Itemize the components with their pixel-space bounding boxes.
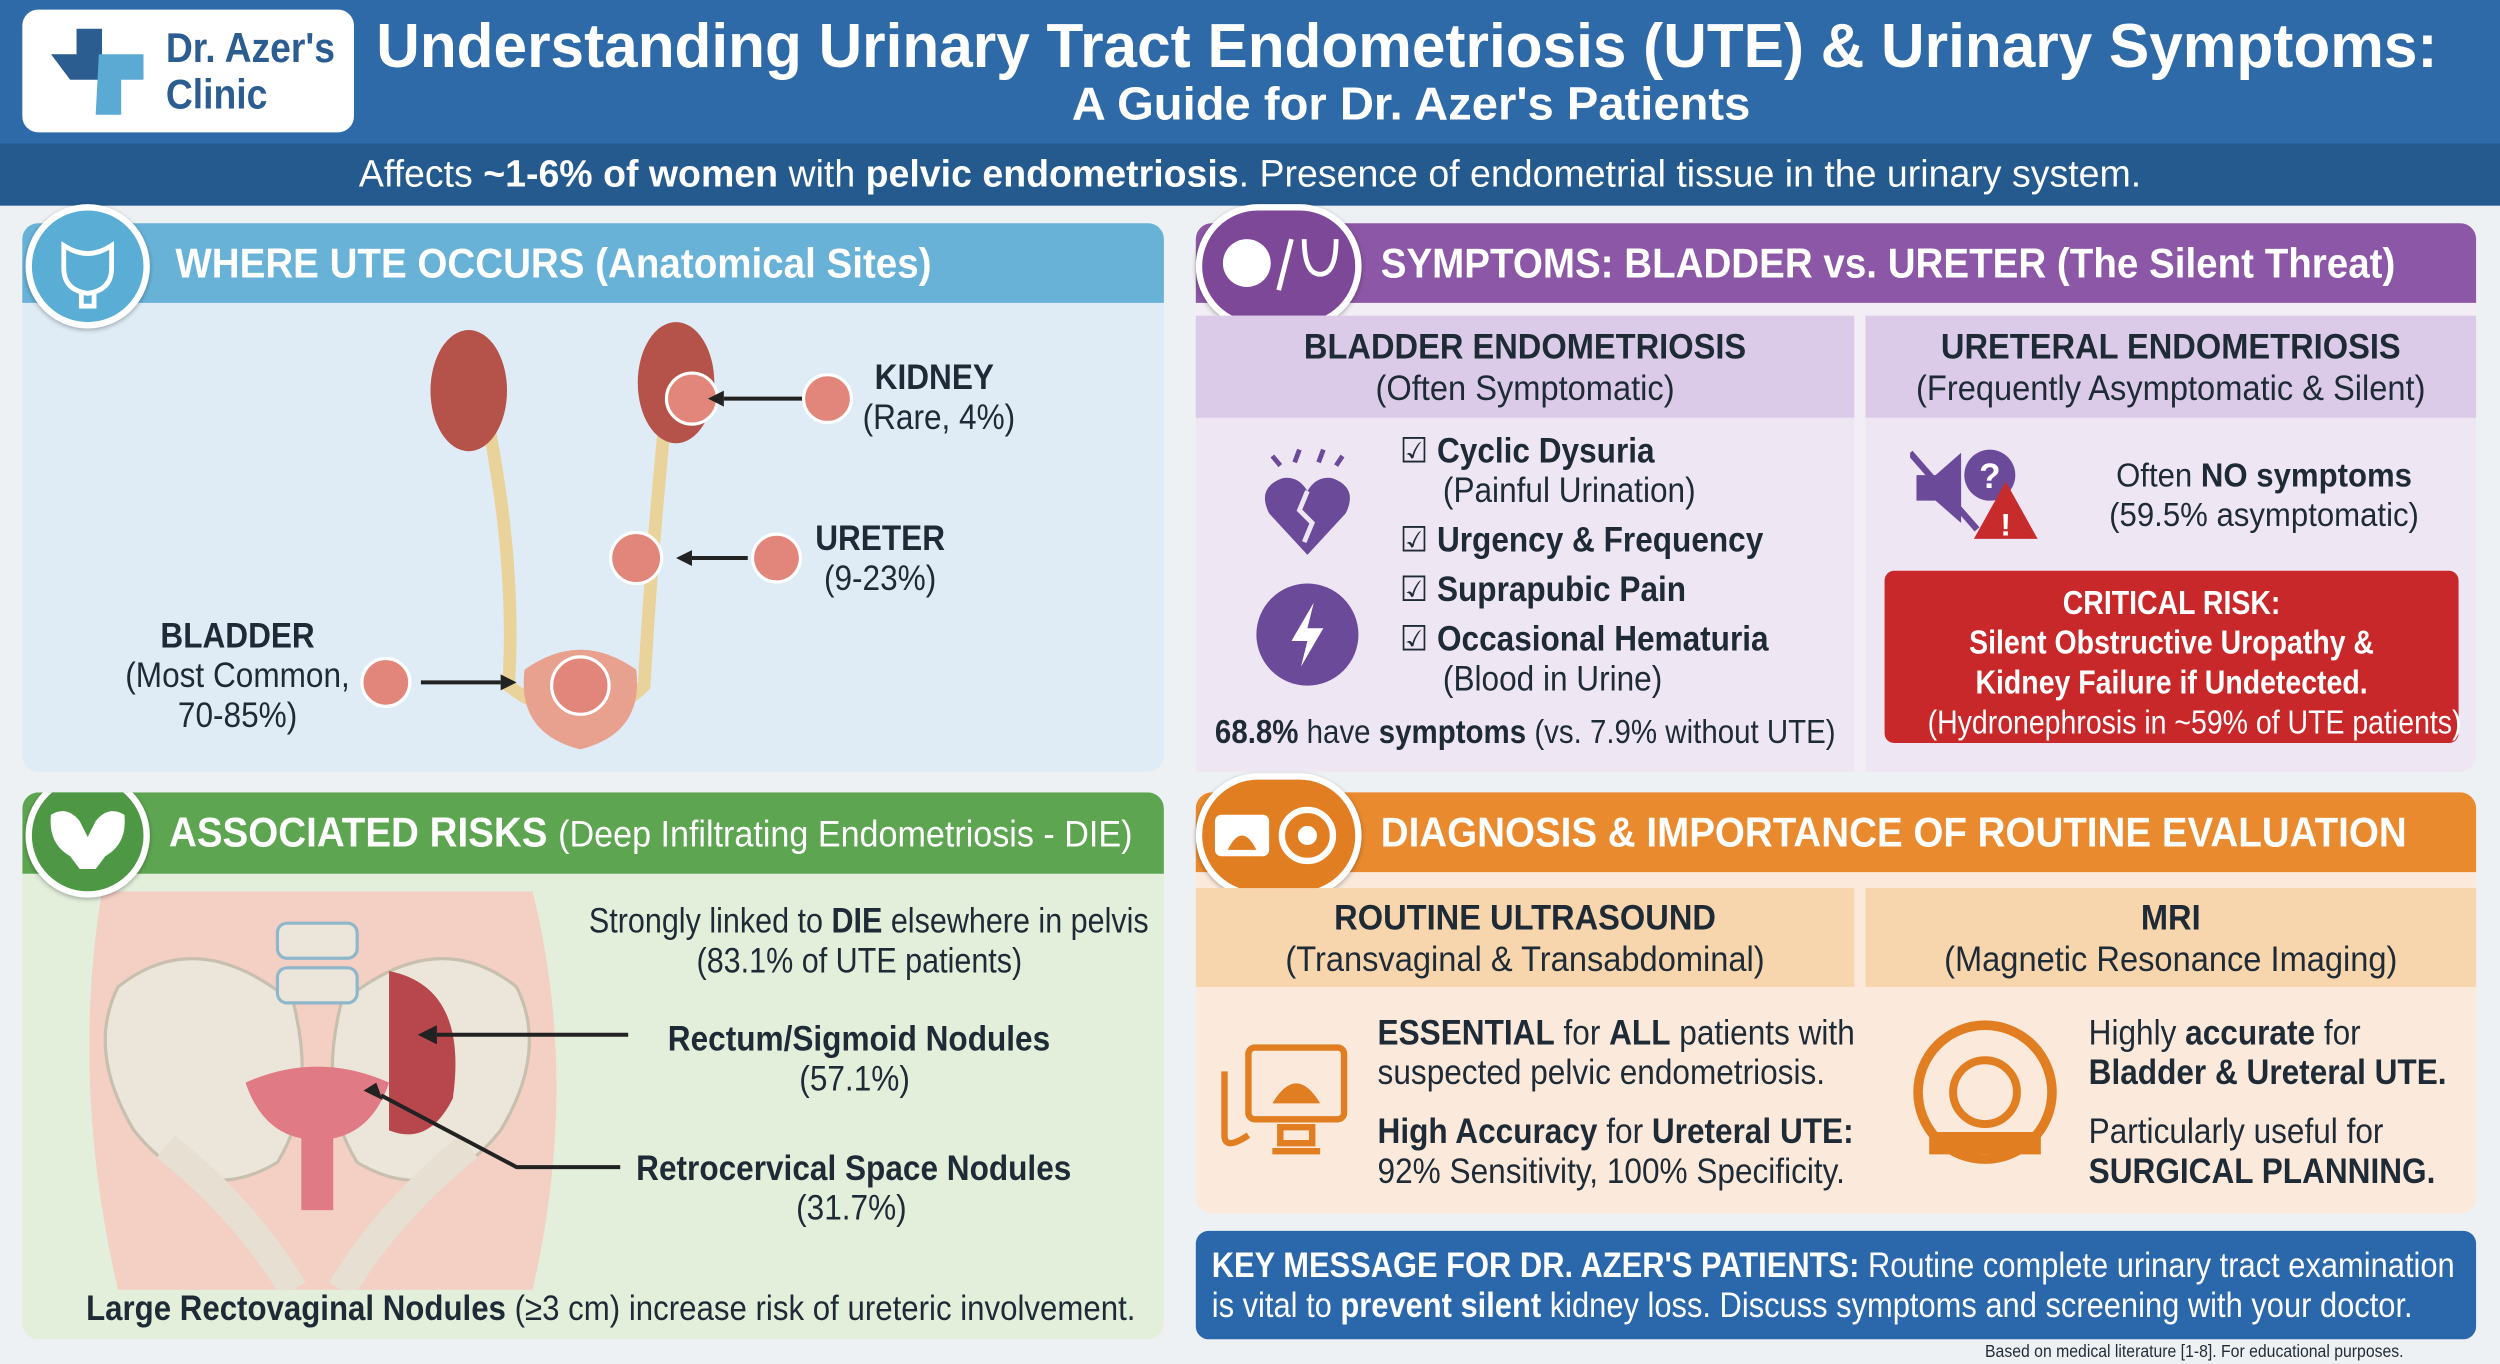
logo: Clinic [166, 70, 267, 118]
icon: ultrasound/mri [1196, 773, 1362, 898]
label: ureter [815, 518, 945, 598]
panel: associated risks: ASSOCIATED RISKS (Deep Infiltrating Endometriosis - DIE) [169, 808, 1132, 856]
symptom list: ☑ Urgency & Frequency [1400, 520, 1763, 560]
label: bladder: 70-85%) [178, 695, 297, 735]
symptom list [1400, 430, 1769, 698]
callout: critical risk: Kidney Failure if Undetected. [1975, 665, 2368, 702]
text [1378, 1012, 1855, 1191]
arrows [364, 1025, 628, 1170]
text: retrocervical: (31.7%) [796, 1188, 907, 1228]
text: DIE link: Strongly linked to DIE elsewhere in pelvis [589, 901, 1149, 941]
text: ESSENTIAL for ALL patients with [1378, 1012, 1855, 1052]
label: kidney [863, 357, 1015, 437]
column: ultrasound: ROUTINE ULTRASOUND [1334, 898, 1716, 938]
column: MRI: (Magnetic Resonance Imaging) [1944, 939, 2397, 979]
label: kidney: KIDNEY [875, 357, 994, 397]
key message [1196, 1231, 2476, 1339]
icon: MRI scanner [1913, 1020, 2057, 1164]
symptom list: (Painful Urination) [1443, 470, 1696, 510]
text: SURGICAL PLANNING. [2089, 1151, 2435, 1191]
column: ureter: (Frequently Asymptomatic & Silent) [1916, 368, 2425, 408]
column: ultrasound [1196, 888, 1855, 1191]
intro band [0, 143, 2500, 206]
column: bladder: BLADDER ENDOMETRIOSIS [1304, 327, 1746, 367]
icon: head/ureter [1196, 204, 1362, 328]
text: rectum [668, 1019, 1050, 1099]
label: ureter: URETER [815, 518, 945, 558]
column: ureter [1865, 316, 2476, 772]
panel: symptoms [1196, 223, 2476, 772]
stat: 68.8% have symptoms (vs. 7.9% without UTE) [1215, 714, 1836, 751]
text: rectovaginal: Large Rectovaginal Nodules (≥3 cm) increase risk of ureteric involvement. [86, 1288, 1135, 1328]
icon: ultrasound machine [1221, 1044, 1348, 1154]
text: 92% Sensitivity, 100% Specificity. [1378, 1151, 1845, 1191]
label: ureter: (9-23%) [824, 558, 936, 598]
text: rectum: Rectum/Sigmoid Nodules [668, 1019, 1050, 1059]
intro band: Affects ~1-6% of women with pelvic endometriosis. Presence of endometrial tissue in the urinary system. [359, 153, 2141, 196]
icon: broken heart [1264, 448, 1350, 555]
panel: diagnosis: DIAGNOSIS & IMPORTANCE OF ROUTINE EVALUATION [1381, 808, 2407, 856]
pelvis illustration [89, 892, 556, 1290]
key message: is vital to prevent silent kidney loss. Discuss symptoms and screening with your doctor. [1212, 1285, 2413, 1325]
text: retrocervical: Retrocervical Space Nodules [636, 1148, 1071, 1188]
text: suspected pelvic endometriosis. [1378, 1052, 1825, 1092]
anatomy diagram [430, 322, 718, 750]
icon: pelvis [26, 773, 150, 898]
icon: silent warning: ! [2000, 507, 2011, 543]
icon: bladder [26, 204, 150, 328]
column: bladder: (Often Symptomatic) [1375, 368, 1675, 408]
key message: KEY MESSAGE FOR DR. AZER'S PATIENTS: Routine complete urinary tract examination [1212, 1245, 2455, 1285]
column: MRI: MRI [2141, 898, 2201, 938]
logo [22, 10, 354, 132]
callout: critical risk: CRITICAL RISK: [2063, 585, 2280, 622]
label: kidney: (Rare, 4%) [863, 397, 1015, 437]
icon: silent warning: ? [1979, 457, 2001, 496]
text: rectum: (57.1%) [799, 1059, 910, 1099]
column: ureter: URETERAL ENDOMETRIOSIS [1941, 327, 2401, 367]
text: DIE link: (83.1% of UTE patients) [697, 941, 1022, 981]
text: Highly accurate for [2089, 1012, 2361, 1052]
header [0, 0, 2500, 143]
text: (59.5% asymptomatic) [2109, 497, 2419, 534]
text: Particularly useful for [2089, 1111, 2383, 1151]
symptom list: (Blood in Urine) [1443, 658, 1662, 698]
title: Understanding Urinary Tract Endometriosis (UTE) & Urinary Symptoms: [376, 13, 2437, 81]
text: Bladder & Ureteral UTE. [2089, 1052, 2447, 1092]
icon: silent warning [1910, 450, 2038, 543]
symptom list: ☑ Occasional Hematuria [1400, 619, 1769, 658]
text: retrocervical [636, 1148, 1071, 1228]
callout: critical risk [1885, 571, 2459, 743]
text: High Accuracy for Ureteral UTE: [1378, 1111, 1854, 1151]
callout: critical risk: Silent Obstructive Uropathy & [1969, 625, 2374, 662]
label: bladder: BLADDER [160, 615, 315, 655]
symptom list: ☑ Cyclic Dysuria [1400, 430, 1655, 470]
callout: critical risk: (Hydronephrosis in ~59% of UTE patients) [1928, 705, 2462, 741]
logo: Dr. Azer's [166, 24, 335, 72]
panel: where UTE occurs [22, 223, 1164, 772]
footer: Based on medical literature [1-8]. For educational purposes. [1985, 1342, 2404, 1362]
text: DIE link [589, 901, 1149, 981]
text [2089, 1012, 2447, 1191]
arrows & markers [360, 373, 853, 708]
panel: diagnosis [1196, 792, 2476, 1213]
text: Often NO symptoms [2116, 458, 2412, 494]
label: bladder [125, 615, 350, 735]
text [2109, 458, 2419, 534]
symptom list: ☑ Suprapubic Pain [1400, 569, 1686, 609]
column: ultrasound: (Transvaginal & Transabdominal) [1285, 939, 1765, 979]
subtitle: A Guide for Dr. Azer's Patients [1072, 80, 1750, 131]
column: bladder [1196, 316, 1854, 772]
panel: associated risks [22, 792, 1164, 1339]
panel: where UTE occurs: WHERE UTE OCCURS (Anatomical Sites) [175, 239, 932, 287]
column: MRI [1866, 888, 2476, 1191]
label: bladder: (Most Common, [125, 655, 350, 695]
icon: lightning [1256, 584, 1358, 686]
panel: symptoms: SYMPTOMS: BLADDER vs. URETER (The Silent Threat) [1381, 239, 2395, 287]
